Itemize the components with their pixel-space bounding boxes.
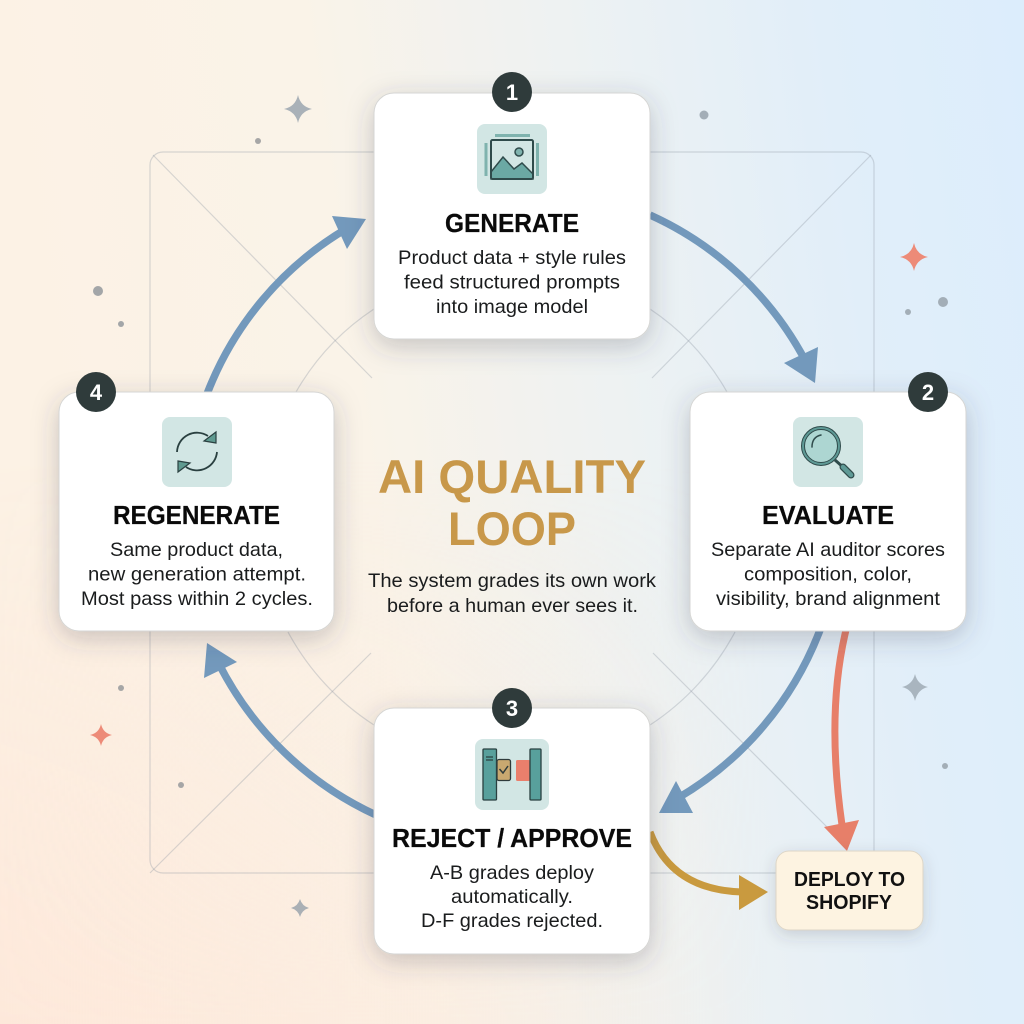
description (421, 862, 603, 932)
description: into image model (436, 296, 588, 318)
badge 1 (492, 72, 532, 112)
arrow: reject/approve to regenerate (204, 643, 376, 815)
badge 3 (492, 688, 532, 728)
description: visibility, brand alignment (716, 588, 941, 610)
description (711, 539, 945, 610)
panel: evaluate (690, 372, 966, 631)
panel: generate (374, 72, 650, 339)
description: Separate AI auditor scores (711, 539, 945, 561)
panel: regenerate (59, 372, 334, 631)
description: Product data + style rules (398, 247, 626, 269)
description: automatically. (451, 886, 573, 908)
subtitle: before a human ever sees it. (387, 595, 638, 617)
badge 4 (76, 372, 116, 412)
heading: GENERATE (445, 210, 579, 238)
title (378, 450, 646, 555)
description: Same product data, (110, 539, 283, 561)
subtitle (368, 570, 656, 617)
description: A-B grades deploy (430, 862, 594, 884)
arrow: evaluate to deploy (824, 630, 859, 851)
heading: REGENERATE (113, 502, 280, 530)
badge 2: 2 (922, 380, 934, 405)
description: feed structured prompts (404, 272, 620, 294)
decorative sparkles and dots (90, 95, 948, 917)
badge 4: 4 (90, 380, 103, 405)
panel: reject / approve (374, 688, 650, 954)
description: new generation attempt. (88, 564, 306, 586)
callout: deploy to shopify: SHOPIFY (806, 892, 893, 914)
arrow: approve to deploy (650, 832, 768, 910)
badge 3: 3 (506, 696, 518, 721)
badge 1: 1 (506, 80, 518, 105)
background frame grid (150, 152, 874, 873)
description: Most pass within 2 cycles. (81, 588, 313, 610)
arrow: evaluate to reject/approve (659, 630, 820, 813)
heading: REJECT / APPROVE (392, 825, 632, 853)
icon: gate (475, 739, 549, 810)
callout: deploy to shopify (776, 851, 923, 930)
description (398, 247, 626, 318)
badge 2 (908, 372, 948, 412)
arrow: generate to evaluate (650, 215, 818, 383)
title: AI QUALITY (378, 450, 646, 503)
icon: image (477, 124, 547, 194)
arrow: regenerate to generate (207, 216, 366, 394)
icon: refresh (162, 417, 232, 487)
subtitle: The system grades its own work (368, 570, 656, 592)
description: D-F grades rejected. (421, 910, 603, 932)
description (81, 539, 313, 610)
title: LOOP (448, 502, 576, 555)
callout: deploy to shopify: DEPLOY TO (794, 869, 905, 891)
description: composition, color, (744, 564, 912, 586)
icon: magnifier (793, 417, 863, 487)
heading: EVALUATE (762, 502, 894, 530)
